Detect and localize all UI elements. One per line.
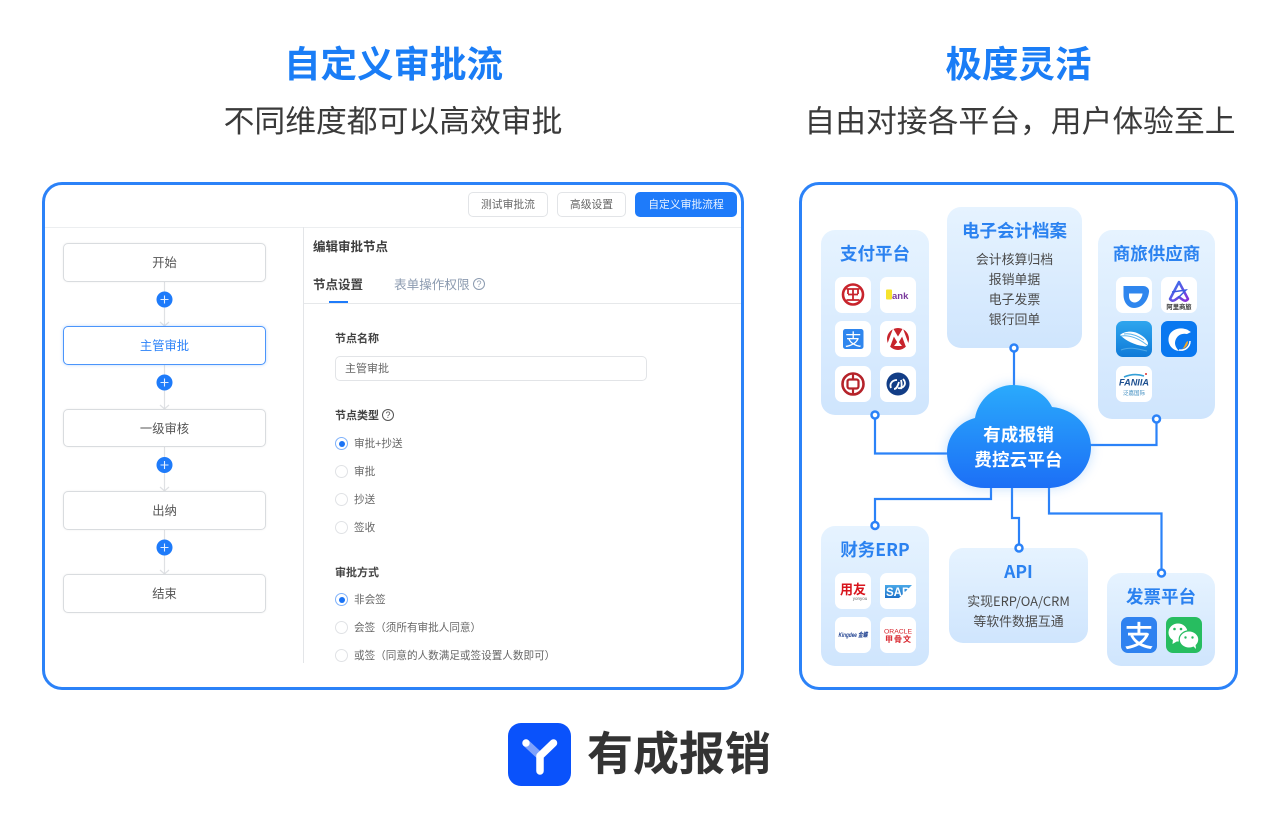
node: manager approval (selected)	[63, 326, 266, 365]
API description line: 等软件数据互通	[973, 611, 1064, 630]
icon: CMB	[880, 321, 916, 357]
archive item: 报销单据	[989, 269, 1040, 288]
icon: SAP	[880, 573, 916, 609]
card title: API	[1004, 559, 1033, 584]
card title: 支付平台	[840, 241, 910, 266]
radio label: approve and cc: 审批+抄送	[354, 438, 403, 450]
card title: 发票平台	[1126, 584, 1196, 609]
icon: type help	[382, 409, 394, 421]
radio: non-joint	[335, 593, 348, 606]
icon: Yonyou: 用友	[840, 579, 866, 598]
button: test flow: 测试审批流	[481, 199, 535, 211]
input: node name: 主管审批	[345, 363, 389, 375]
radio: or	[335, 649, 348, 662]
icon: logo mark	[508, 723, 571, 786]
button: customize flow: 自定义审批流程	[648, 199, 724, 211]
tab underline	[329, 301, 348, 303]
radio label: joint: 会签（须所有审批人同意）	[354, 622, 481, 634]
node: end: 结束	[152, 587, 177, 601]
icon: DiDi	[1116, 277, 1152, 313]
icon: Alitrip	[1161, 277, 1197, 313]
icon: Alipay: 支	[845, 326, 861, 350]
brand name: 有成报销	[587, 728, 771, 780]
card title: 电子会计档案	[962, 218, 1067, 243]
label: node type: 节点类型	[335, 410, 379, 422]
panel frame	[799, 182, 1238, 690]
tab: form permissions: 表单操作权限	[394, 278, 470, 292]
editor title: 编辑审批节点	[313, 240, 388, 254]
API description line: 实现ERP/OA/CRM	[967, 591, 1070, 610]
node: start	[63, 243, 266, 282]
cloud label	[974, 425, 1063, 470]
radio label: non-joint: 非会签	[354, 594, 386, 606]
icon: WeChat	[1166, 617, 1202, 653]
radio: cc	[335, 493, 348, 506]
panel frame	[42, 182, 744, 690]
toolbar divider	[45, 227, 741, 228]
subheading: flexibility: 自由对接各平台，用户体验至上	[804, 104, 1236, 139]
node: manager approval (selected): 主管审批	[140, 339, 189, 353]
icon: ICBC	[835, 277, 871, 313]
icon: Oracle: 甲骨文	[885, 634, 911, 645]
icon: train	[1116, 321, 1152, 357]
node: cashier	[63, 491, 266, 530]
cloud label: 有成报销	[983, 425, 1054, 445]
input: node name	[335, 356, 647, 381]
cloud label: 费控云平台	[974, 450, 1063, 470]
icon: tab help	[473, 278, 485, 290]
archive item: 会计核算归档	[976, 249, 1053, 268]
icon: Fanjia: 泛嘉国际	[1123, 389, 1145, 397]
tab: node settings: 节点设置	[313, 278, 363, 292]
column divider	[303, 227, 304, 663]
label: approval mode: 审批方式	[335, 567, 379, 579]
archive item: 银行回单	[989, 309, 1040, 328]
icon: Bank	[880, 277, 916, 313]
icon: Alitrip: 阿里商旅	[1166, 302, 1192, 311]
card: finance ERP	[821, 526, 929, 666]
icon: type help: ?	[385, 410, 390, 420]
icon: tab help: ?	[476, 279, 482, 289]
icon: Bank: ank	[892, 291, 909, 302]
icon: Alipay	[835, 321, 871, 357]
icon: Ctrip dolphin	[1161, 321, 1197, 357]
icon: Kingdee	[835, 617, 871, 653]
icon: SPD bank	[880, 366, 916, 402]
icon: Fanjia	[1116, 366, 1152, 402]
radio label: sign: 签收	[354, 522, 375, 534]
radio: approve and cc	[335, 437, 348, 450]
card: payment platforms	[821, 230, 929, 415]
icon: Bank of China	[835, 366, 871, 402]
icon: Yonyou: yonyou	[853, 596, 868, 601]
node: start: 开始	[152, 256, 177, 270]
card: e-accounting archive	[947, 207, 1082, 348]
card: API	[949, 548, 1088, 643]
subheading: approval flow: 不同维度都可以高效审批	[224, 104, 562, 139]
label: node name: 节点名称	[335, 333, 379, 345]
radio: joint	[335, 621, 348, 634]
node: level one review	[63, 409, 266, 447]
archive item: 电子发票	[989, 289, 1040, 308]
icon: Fanjia: FANIIA	[1119, 378, 1149, 388]
radio label: approve: 审批	[354, 466, 375, 478]
button: advanced settings	[557, 192, 626, 217]
card title: 商旅供应商	[1113, 241, 1200, 266]
icon: SAP: SAP	[886, 587, 910, 599]
radio label: cc: 抄送	[354, 494, 375, 506]
radio: sign	[335, 521, 348, 534]
node: cashier: 出纳	[152, 504, 177, 518]
node: end	[63, 574, 266, 613]
card title: 财务ERP	[840, 537, 910, 562]
radio label: or: 或签（同意的人数满足或签设置人数即可）	[354, 650, 555, 662]
brand logo	[508, 723, 771, 786]
icon: Yonyou	[835, 573, 871, 609]
radio: approve	[335, 465, 348, 478]
card: travel suppliers	[1098, 230, 1215, 419]
card: invoice platforms	[1107, 573, 1215, 666]
heading: custom approval flow: 自定义审批流	[284, 44, 503, 85]
button: test flow	[468, 192, 548, 217]
icon: Oracle	[880, 617, 916, 653]
heading: flexibility: 极度灵活	[946, 44, 1092, 85]
button: customize flow	[635, 192, 737, 217]
icon: Oracle: ORACLE	[884, 628, 913, 636]
button: advanced settings: 高级设置	[570, 199, 613, 211]
tab divider	[304, 303, 741, 304]
node: level one review: 一级审核	[140, 422, 189, 436]
